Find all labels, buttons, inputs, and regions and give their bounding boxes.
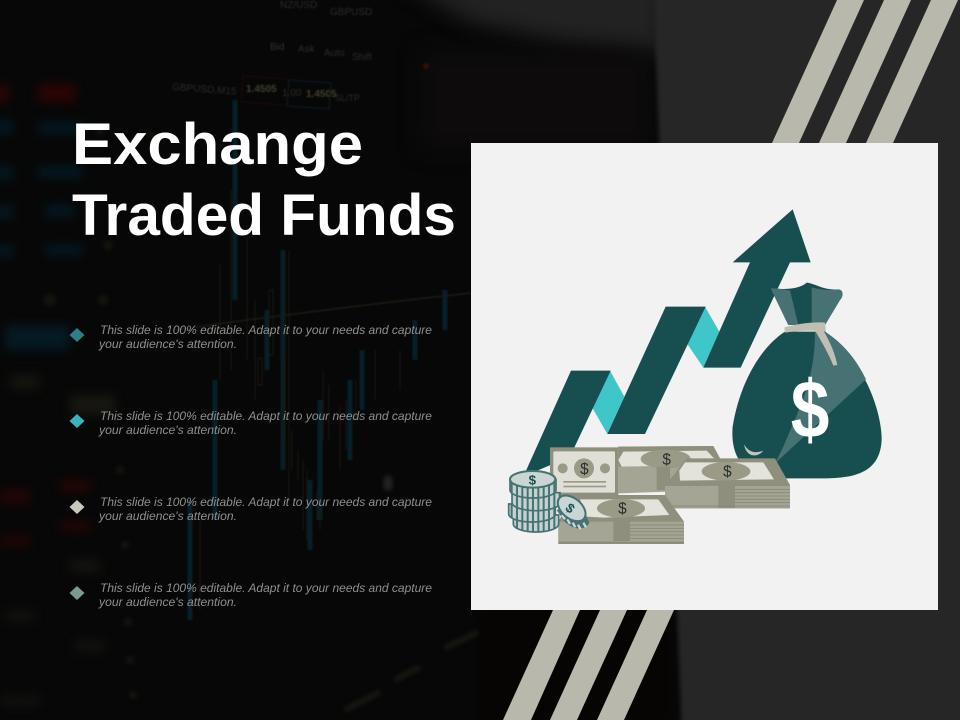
faint trading labels: Shift bbox=[352, 52, 372, 63]
faint trading labels: SL/TP bbox=[335, 93, 360, 103]
faint trading labels: NZ/USD bbox=[280, 0, 317, 11]
icon: cash stack front bbox=[558, 495, 684, 544]
faint trading labels: 1.4505 bbox=[246, 84, 277, 95]
faint trading labels: GBPUSD,M15 bbox=[172, 82, 237, 98]
icon: money bag bbox=[732, 283, 882, 478]
faint trading labels bbox=[172, 0, 429, 109]
decorative stripes: bottom bbox=[503, 610, 674, 720]
icon: banknote with portrait bbox=[550, 447, 618, 497]
icon: cash stack right: $ bbox=[723, 464, 732, 481]
bullet item 2: This slide is 100% editable. Adapt it to your needs and capture bbox=[100, 409, 432, 423]
faint trading labels: GBPUSD bbox=[330, 7, 372, 18]
bullet item 3 bbox=[70, 495, 432, 523]
bullet item 2: your audience's attention. bbox=[98, 423, 237, 437]
bullet item 2 bbox=[70, 409, 432, 437]
faint trading labels: Ask bbox=[298, 44, 316, 55]
title bbox=[72, 112, 456, 248]
faint trading labels: Auto bbox=[324, 48, 345, 59]
faint trading labels: 1.4505 bbox=[306, 89, 337, 100]
icon: coin stack: $ bbox=[529, 472, 537, 487]
icon: cash stack back: $ bbox=[662, 451, 671, 468]
decorative stripes: top right bbox=[772, 0, 958, 143]
faint trading labels: 1.00 bbox=[282, 88, 302, 99]
icon: money bag: $ bbox=[791, 364, 829, 456]
bullet list bbox=[70, 323, 432, 609]
icon: rising zig-zag arrow bbox=[523, 209, 811, 477]
bullet item 3: your audience's attention. bbox=[98, 509, 237, 523]
illustration: money, growth arrow and bag bbox=[509, 209, 882, 544]
title: Traded Funds bbox=[72, 183, 456, 248]
panel: illustration card bbox=[471, 143, 938, 610]
icon: leaning coin bbox=[553, 490, 590, 529]
title: Exchange bbox=[72, 112, 363, 177]
icon: cash stack back bbox=[618, 446, 720, 493]
bullet item 3: This slide is 100% editable. Adapt it to your needs and capture bbox=[100, 495, 432, 509]
bullet item 1: This slide is 100% editable. Adapt it to your needs and capture bbox=[100, 323, 432, 337]
icon: cash stack front: $ bbox=[618, 500, 627, 517]
bullet item 4: This slide is 100% editable. Adapt it to your needs and capture bbox=[100, 581, 432, 595]
faint trading labels: Bid bbox=[270, 42, 284, 53]
bullet item 4 bbox=[70, 581, 432, 609]
icon: banknote with portrait: $ bbox=[580, 461, 589, 478]
bullet item 1 bbox=[70, 323, 432, 351]
bullet item 4: your audience's attention. bbox=[98, 595, 237, 609]
icon: leaning coin: $ bbox=[562, 500, 578, 517]
icon: coin stack bbox=[509, 471, 560, 532]
icon: cash stack right bbox=[665, 458, 790, 508]
faint candlestick chart bbox=[175, 100, 470, 620]
bullet item 1: your audience's attention. bbox=[98, 337, 237, 351]
